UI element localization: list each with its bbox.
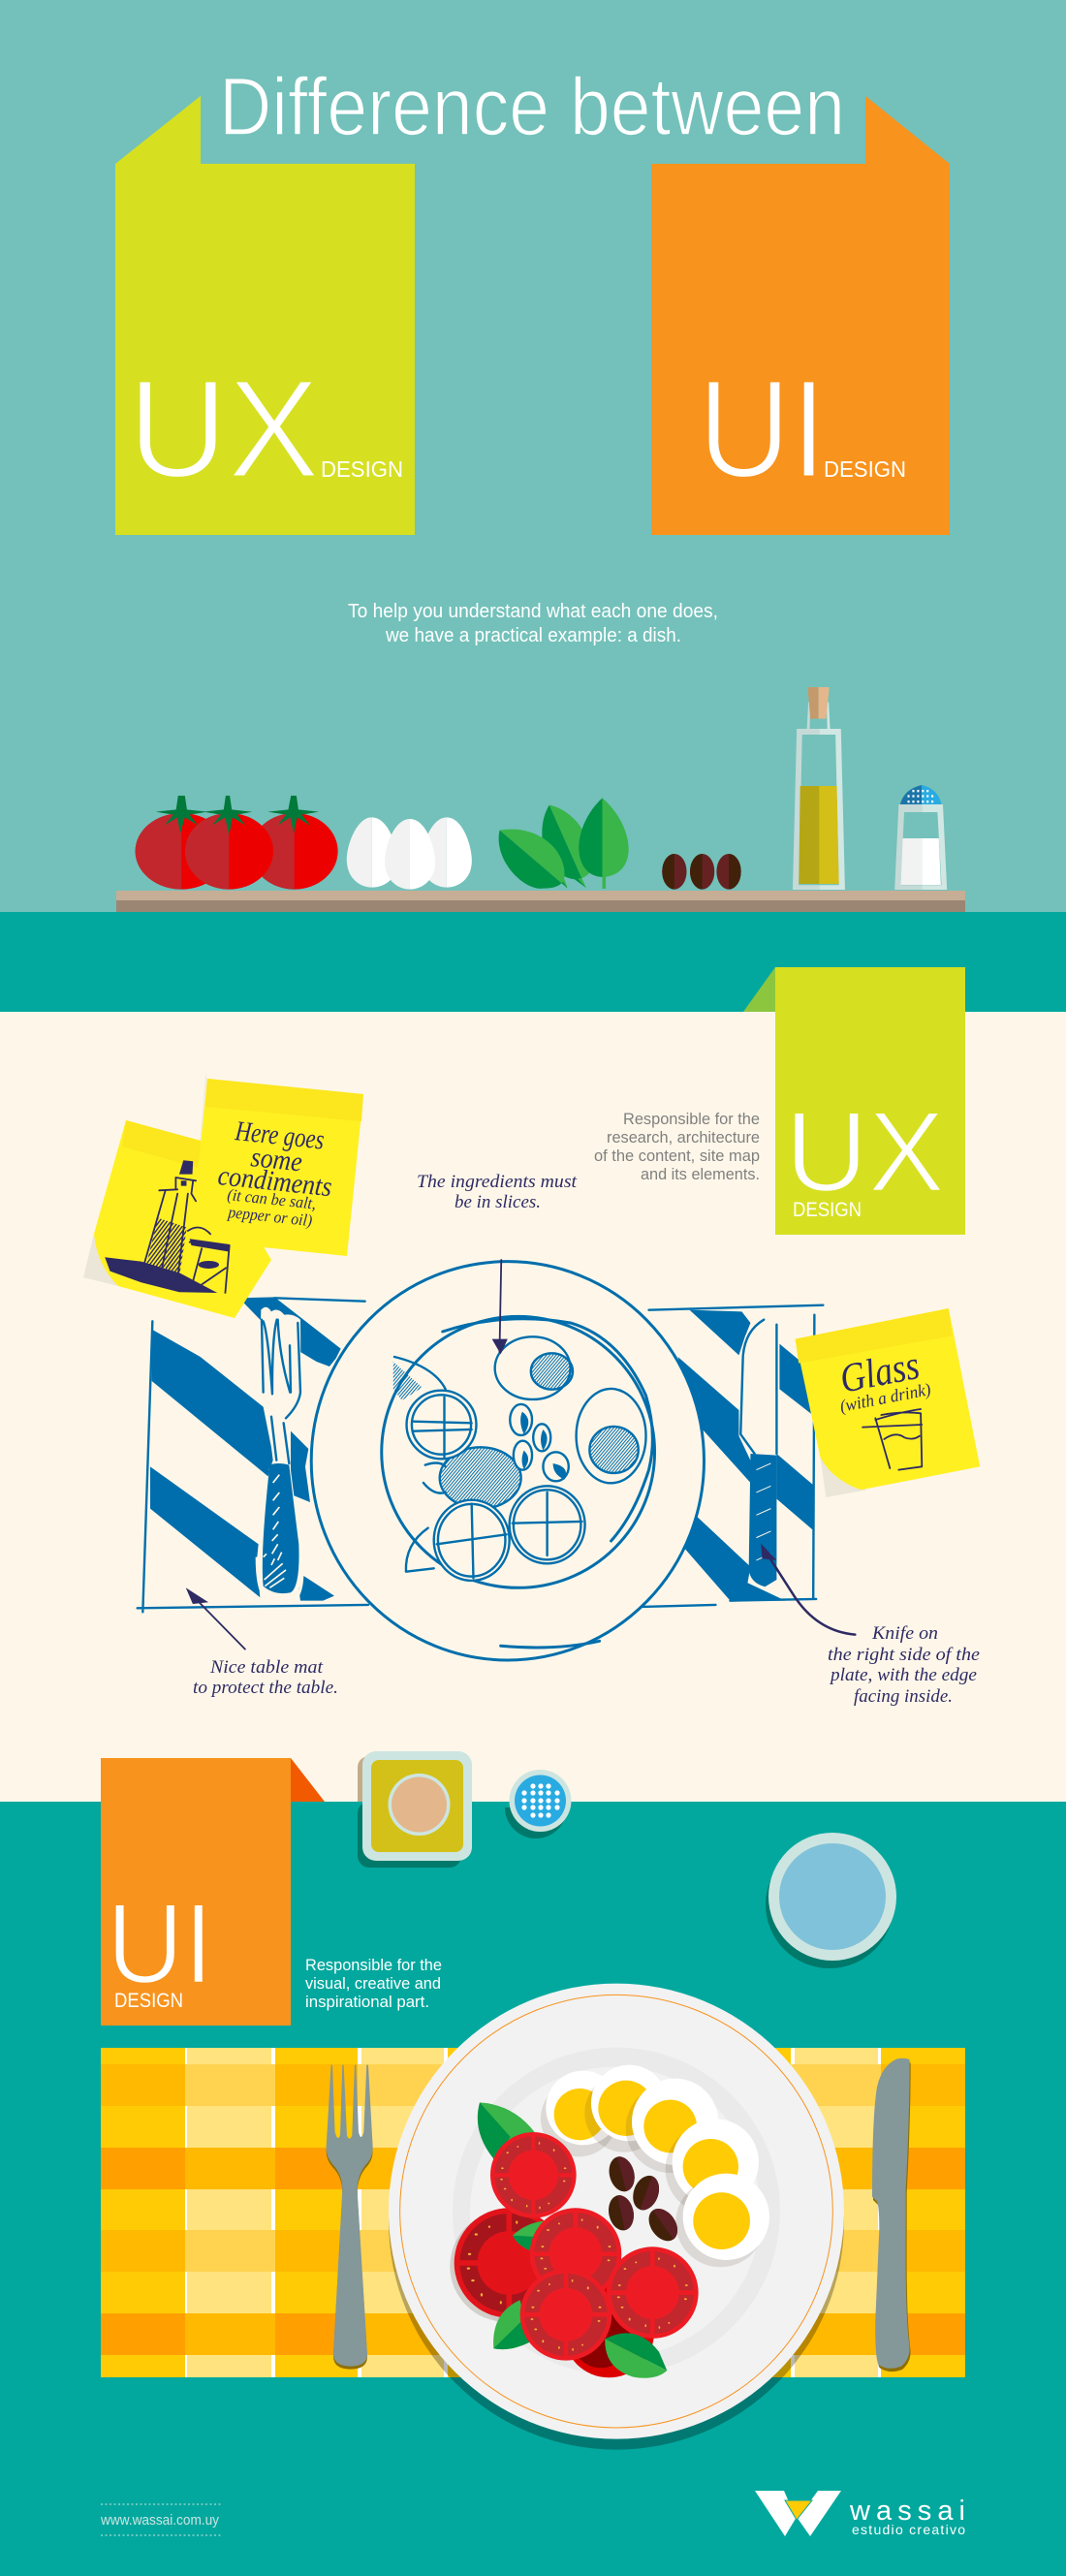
icon: glass sketch [862,1409,922,1470]
UX description [594,1110,760,1183]
logo: wassai [755,2491,965,2537]
UX tag [743,967,965,1235]
background: cream sketch section [0,1012,1066,1802]
sketched basil leaves [393,1357,446,1572]
logo: wassai: wassai [849,2496,965,2527]
icon: basil leaves [499,798,629,889]
icon: tomatoes [136,796,338,890]
icon: eggs [347,817,472,890]
icon: fork [327,2065,373,2370]
table mat [101,2048,965,2377]
note text: glass: (with a drink) [838,1379,932,1417]
note: knife label: the right side of the [828,1645,980,1665]
note text: condiments: some [249,1142,303,1178]
UX description: and its elements. [641,1165,760,1183]
website link: www.wassai.com.uy [100,2512,219,2529]
UI description [305,1956,442,2011]
UI card: DESIGN [824,456,906,482]
UI description: Responsible for the [305,1956,442,1974]
panel: UI section [101,1751,965,2450]
inner plate outline [382,1316,655,1648]
icon: drinking glass from above [766,1833,896,1968]
callout arrow: knife [761,1544,855,1635]
background: dark teal band [0,912,1066,1012]
ingredients drawn in local coordinates [136,687,947,890]
olives [606,2153,683,2246]
shelf [116,891,965,912]
UI description: visual, creative and [305,1974,441,1993]
UI card [651,96,950,535]
sketch: right table mat and knife [629,1305,823,1607]
UX tag: DESIGN [793,1199,862,1221]
sketch: plate and food [186,1260,855,1660]
panel: UX sketch section [83,967,980,1707]
callout arrow: ingredients [492,1260,508,1354]
icon: salt shaker [894,785,947,890]
note: ingredients label: The ingredients must [417,1172,578,1192]
title: Difference between [219,61,845,152]
note text: condiments: (it can be salt, [227,1185,317,1213]
UX description: research, architecture [607,1128,760,1147]
intro text: we have a practical example: a dish. [385,625,681,646]
icon: knife [872,2058,911,2372]
UI tag [101,1758,325,2026]
icon: salt shaker from above [505,1770,572,1838]
UX card: DESIGN [321,456,403,482]
UI description: inspirational part. [305,1993,429,2011]
note text: condiments: Here goes [233,1115,326,1156]
note: knife label: plate, with the edge [829,1665,977,1685]
panel: footer [100,2491,965,2537]
sketch: left table mat and fork [138,1297,368,1612]
UI tag: DESIGN [114,1990,183,2012]
note: knife label: Knife on [871,1623,938,1644]
note text: condiments [216,1115,333,1230]
note text: condiments: condiments [216,1160,333,1203]
icon: lighthouse sketch [105,1160,230,1293]
sticky note: condiments [83,1074,363,1318]
UX card: UX [128,351,320,507]
panel: ingredients on shelf [116,687,965,912]
icon: oil bottle [793,687,845,890]
note: ingredients label [417,1172,578,1212]
note: table mat label [193,1657,338,1698]
plate [389,1984,844,2450]
note: table mat label: Nice table mat [209,1657,324,1678]
panel: header [115,61,950,646]
note text: glass: Glass [836,1343,923,1402]
sticky note: glass [796,1308,980,1497]
sketched egg slices [495,1336,646,1483]
website link [100,2504,221,2535]
egg slices [541,2065,769,2267]
UI tag: UI [107,1880,213,2008]
icon: oil dish from above [358,1751,472,1868]
callout arrow: table mat [186,1587,245,1649]
background: upper teal wall [0,0,1066,912]
note: ingredients label: be in slices. [455,1192,541,1212]
plate with food [389,1984,844,2450]
icon: olives [662,854,741,890]
UX description: Responsible for the [623,1110,760,1128]
note: knife label [828,1623,980,1707]
tomato slices [450,2132,699,2377]
UX description: of the content, site map [594,1147,760,1165]
sketched olives [510,1404,569,1481]
note: knife label: facing inside. [854,1686,953,1707]
intro text [348,601,718,646]
UX tag: UX [785,1088,945,1216]
basil leaf: bottom [605,2333,667,2378]
note: table mat label: to protect the table. [193,1678,338,1698]
UI card: UI [698,351,827,507]
logo: wassai: estudio creativo [852,2522,965,2537]
plate outline [311,1262,704,1660]
UX card [115,96,415,535]
basil leaf: top [478,2102,535,2159]
intro text: To help you understand what each one does, [348,601,718,622]
sketched tomato slices [407,1391,585,1581]
note text: condiments: pepper or oil) [227,1203,313,1230]
background: dark teal table [0,1802,1066,2576]
